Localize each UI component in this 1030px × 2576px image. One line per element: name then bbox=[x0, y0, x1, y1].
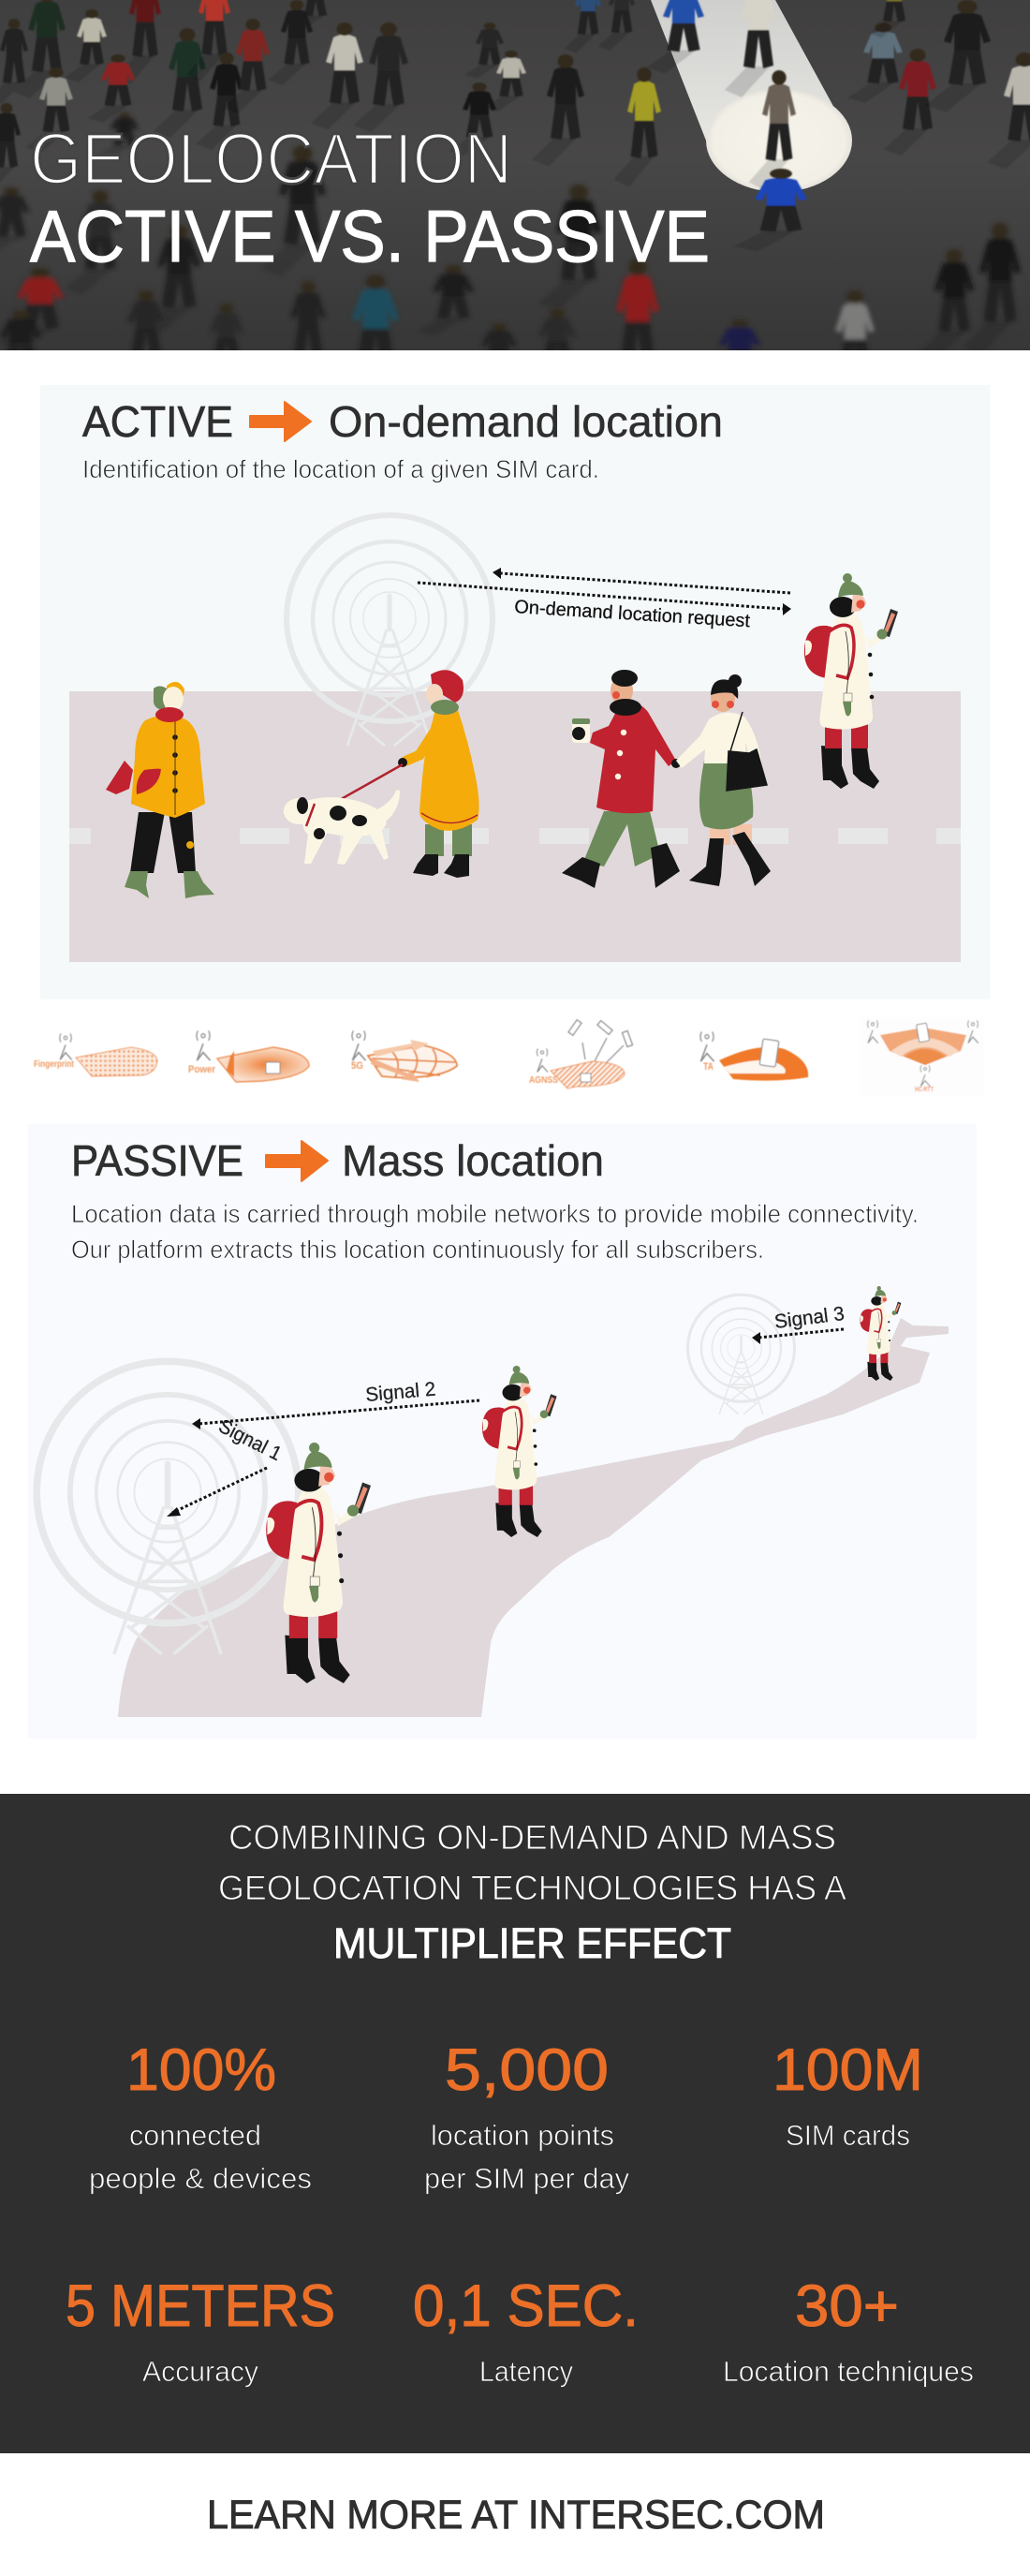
stat: 100%: connected bbox=[129, 2119, 261, 2152]
stat: 100M: 100M bbox=[772, 2037, 923, 2103]
person 1 bbox=[266, 1443, 371, 1683]
stat: 100%: 100% bbox=[126, 2037, 276, 2103]
description: Our platform extracts this location continuously for all subscribers. bbox=[71, 1236, 764, 1264]
road: winding path bbox=[118, 1318, 949, 1717]
stat: 5,000: location points bbox=[431, 2119, 614, 2152]
label: signal 1: Signal 1 bbox=[215, 1415, 285, 1465]
technique: HC-RTT bbox=[861, 1018, 984, 1096]
stat: 0,1 sec: Latency bbox=[479, 2355, 573, 2388]
technique: power bbox=[188, 1030, 309, 1082]
stat: 100M bbox=[772, 2037, 923, 2152]
label: signal 3: Signal 3 bbox=[773, 1303, 846, 1333]
icon: cell tower bbox=[287, 515, 493, 746]
stat: 30+: Location techniques bbox=[723, 2355, 974, 2388]
technique: HC-RTT: HC-RTT bbox=[915, 1087, 934, 1093]
crowd, sharp upper rows bbox=[0, 0, 1030, 251]
technique: 5G bbox=[351, 1030, 457, 1082]
person: yellow coat bbox=[106, 682, 214, 898]
description bbox=[71, 1200, 919, 1264]
icon: tower 1 bbox=[37, 1361, 299, 1654]
technique: AGNSS bbox=[529, 1020, 633, 1088]
description: Location data is carried through mobile networks to provide mobile connectivity. bbox=[71, 1200, 919, 1228]
heading: passive bbox=[71, 1136, 604, 1185]
title: ACTIVE VS. PASSIVE bbox=[30, 195, 710, 277]
crowd, blurred lower rows bbox=[0, 111, 1023, 350]
stat: 100% bbox=[89, 2037, 312, 2195]
road bbox=[69, 691, 961, 962]
panel: passive bbox=[28, 1124, 977, 1739]
stat: 0,1 sec bbox=[413, 2273, 639, 2388]
technique: power: Power bbox=[188, 1064, 216, 1075]
stat: 30+ bbox=[723, 2273, 974, 2388]
stat: 5,000: 5,000 bbox=[445, 2037, 609, 2103]
heading: passive: PASSIVE bbox=[71, 1136, 243, 1185]
stat: 30+: 30+ bbox=[795, 2273, 899, 2339]
technique: TA: TA bbox=[703, 1061, 714, 1073]
footer call to action: LEARN MORE AT INTERSEC.COM bbox=[207, 2493, 825, 2538]
statement bbox=[218, 1818, 846, 1967]
person: backpacker bbox=[804, 573, 898, 789]
person: dog walker bbox=[398, 670, 479, 878]
label: signal 2: Signal 2 bbox=[364, 1379, 436, 1406]
person: man with coffee bbox=[562, 670, 681, 888]
stat: 5 meters bbox=[66, 2273, 335, 2388]
stat: 100%: people & devices bbox=[89, 2162, 312, 2195]
person 2 bbox=[482, 1366, 557, 1537]
icon: dog and leash bbox=[283, 764, 403, 865]
stat: 5,000 bbox=[424, 2037, 629, 2195]
statement: GEOLOCATION TECHNOLOGIES HAS A bbox=[218, 1869, 846, 1907]
person: woman with bag bbox=[676, 674, 771, 886]
heading: active: On-demand location bbox=[329, 397, 723, 446]
technique: fingerprint: Fingerprint bbox=[34, 1059, 75, 1070]
stat: 5 meters: Accuracy bbox=[142, 2355, 258, 2388]
panel: active bbox=[40, 385, 990, 999]
technique: 5G: 5G bbox=[351, 1060, 363, 1072]
arrow: response bbox=[493, 568, 790, 593]
technique: fingerprint bbox=[34, 1033, 157, 1076]
label: request: On-demand location request bbox=[514, 597, 751, 631]
statement: COMBINING ON-DEMAND AND MASS bbox=[228, 1818, 836, 1857]
person 3 bbox=[860, 1286, 901, 1381]
heading: active bbox=[82, 397, 723, 446]
panel: multiplier effect bbox=[0, 1794, 1030, 2453]
icon: tower 3 bbox=[687, 1295, 795, 1414]
stat: 0,1 sec: 0,1 SEC. bbox=[413, 2273, 639, 2339]
spotlight beam bbox=[651, 0, 852, 192]
location techniques row bbox=[34, 1018, 984, 1096]
statement: MULTIPLIER EFFECT bbox=[333, 1919, 731, 1967]
arrow: signal 3 bbox=[752, 1329, 844, 1344]
stat: 5,000: per SIM per day bbox=[424, 2162, 629, 2195]
arrow: signal 1 bbox=[167, 1468, 267, 1517]
technique: TA bbox=[700, 1031, 808, 1081]
stat: 100M: SIM cards bbox=[786, 2119, 910, 2152]
title: GEOLOCATION bbox=[30, 119, 512, 200]
arrow: signal 2 bbox=[192, 1400, 479, 1429]
heading: active: ACTIVE bbox=[82, 397, 233, 446]
heading: passive: Mass location bbox=[342, 1136, 604, 1185]
hero photo: crowd with spotlight bbox=[0, 0, 1030, 400]
technique: AGNSS: AGNSS bbox=[529, 1075, 558, 1086]
arrow: request bbox=[418, 583, 791, 615]
description: Identification of the location of a given SIM card. bbox=[82, 455, 599, 483]
stat: 5 meters: 5 METERS bbox=[66, 2273, 335, 2339]
title bbox=[30, 119, 710, 277]
